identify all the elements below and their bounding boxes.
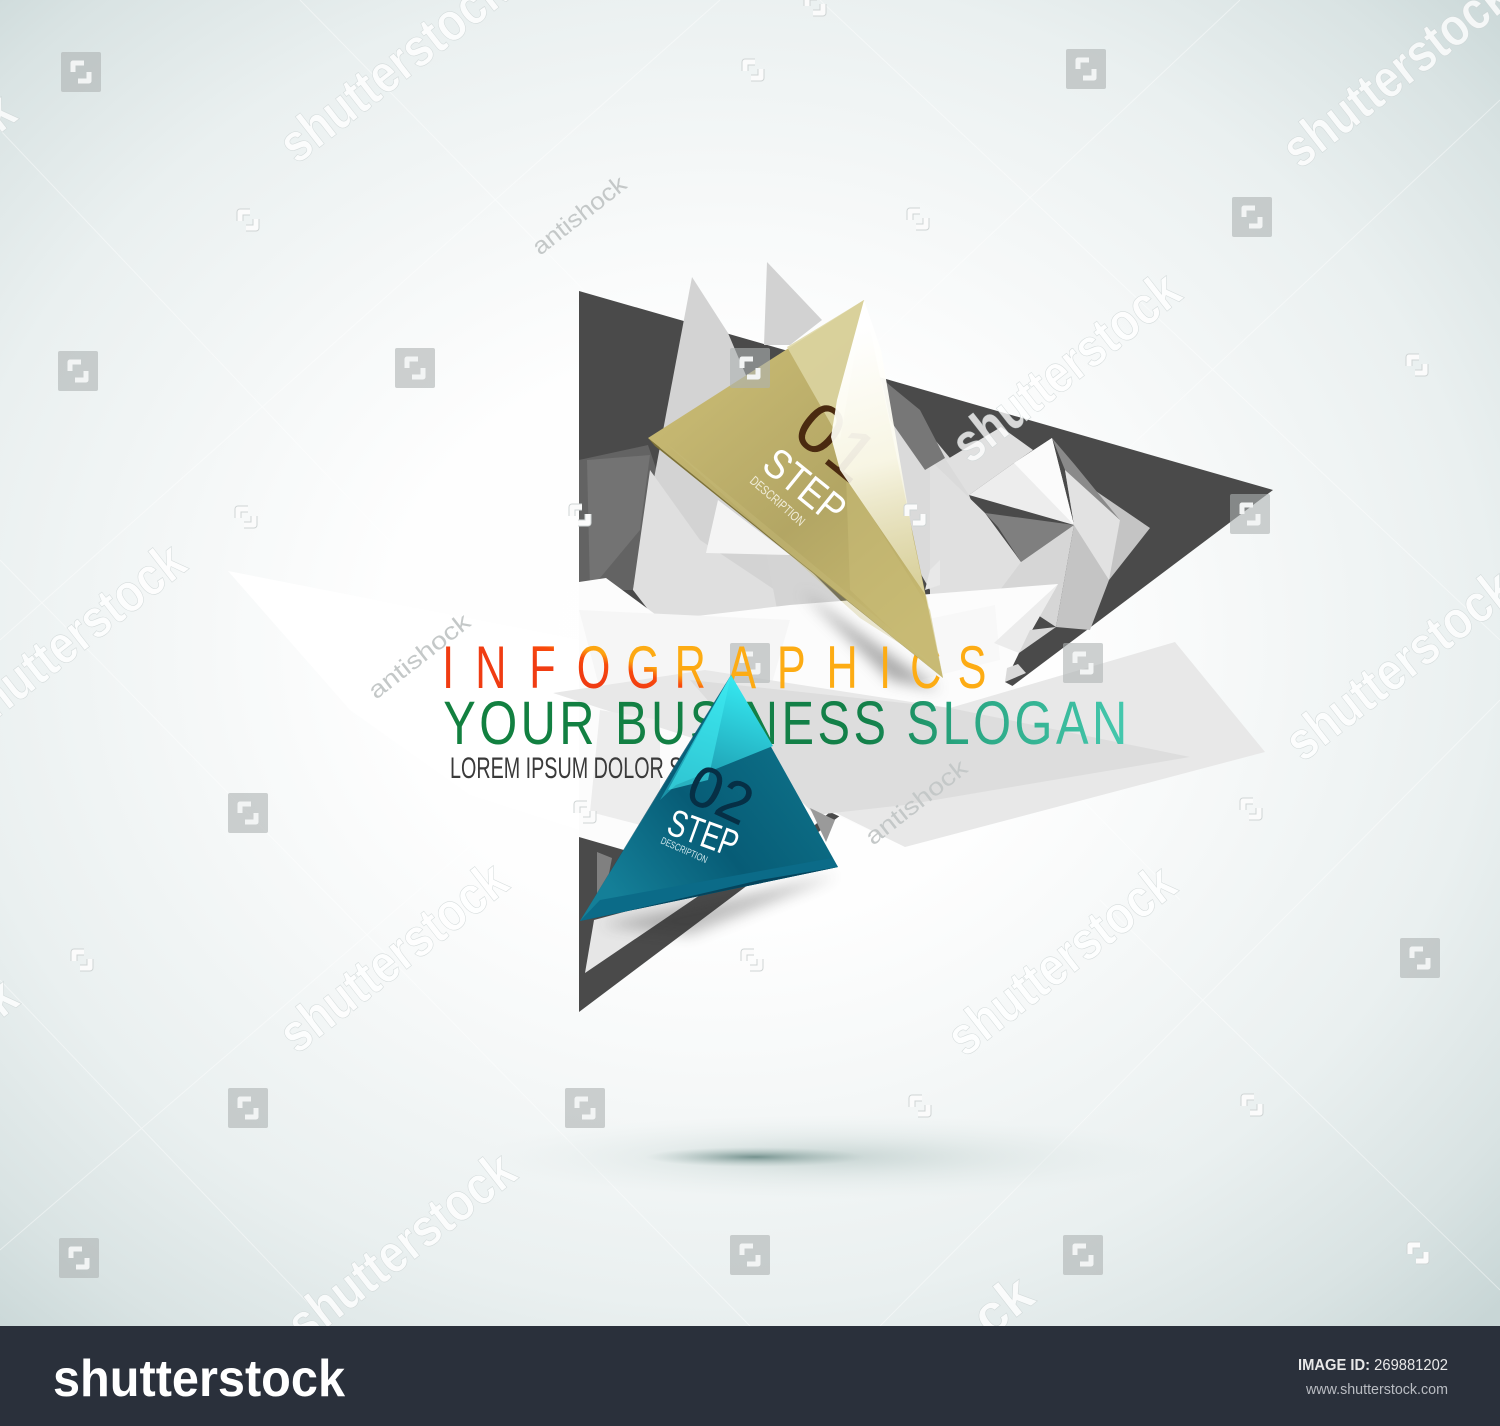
gold upper facet [787, 300, 864, 440]
white overlay band [228, 571, 1058, 885]
step 2 label: STEP [662, 802, 744, 866]
watermarks: ck [960, 1263, 1045, 1347]
wide grey shard [553, 642, 1265, 847]
watermarks: antishock [363, 608, 477, 705]
watermarks: antishock [860, 754, 974, 851]
glass highlight [831, 300, 943, 678]
teal triangle step 2 [580, 675, 838, 935]
folded paper shards behind [587, 262, 1150, 640]
gold triangle step 1 [648, 300, 943, 678]
small shard near teal [810, 808, 835, 842]
crumpled paper cluster [881, 378, 1150, 630]
title text: INFOGRAPHICS [442, 635, 986, 702]
watermarks: antishock [527, 170, 633, 261]
step 1 label: STEP [754, 438, 855, 533]
step 2 description: DESCRIPTION [659, 836, 709, 866]
slogan text: YOUR BUSINESS SLOGAN [443, 689, 1127, 757]
gold soft shadow [800, 590, 940, 690]
shard: tall grey [633, 277, 790, 620]
teal shadow [600, 875, 838, 935]
footer logo: shutterstock [53, 1350, 345, 1408]
lower facet [580, 858, 838, 921]
step 2 number: 02 [678, 752, 763, 838]
lower grey tile inside dark tip [585, 895, 700, 973]
lower grey strip [597, 852, 612, 905]
shard: translucent lower left [633, 470, 850, 640]
step 1 number: 01 [781, 386, 892, 497]
footer bar [0, 1326, 1500, 1426]
subheading text: LOREM IPSUM DOLOR SIT [450, 752, 700, 785]
watermark tile behind title [730, 643, 770, 683]
cyan apex facet [660, 675, 773, 800]
white fan shard left [228, 571, 620, 830]
white mask across the triangle [579, 578, 1058, 885]
shard: white tile [706, 500, 790, 555]
image id: IMAGE ID: 269881202 [1298, 1357, 1448, 1374]
left dark shadow band [579, 445, 660, 590]
floor shadow [480, 1115, 1180, 1199]
dark triangle backdrop [579, 291, 1273, 1012]
site url: www.shutterstock.com [1305, 1381, 1448, 1398]
step 1 description: DESCRIPTION [747, 473, 808, 529]
gold lower edge [648, 438, 943, 678]
shard: rear grey [764, 262, 822, 345]
